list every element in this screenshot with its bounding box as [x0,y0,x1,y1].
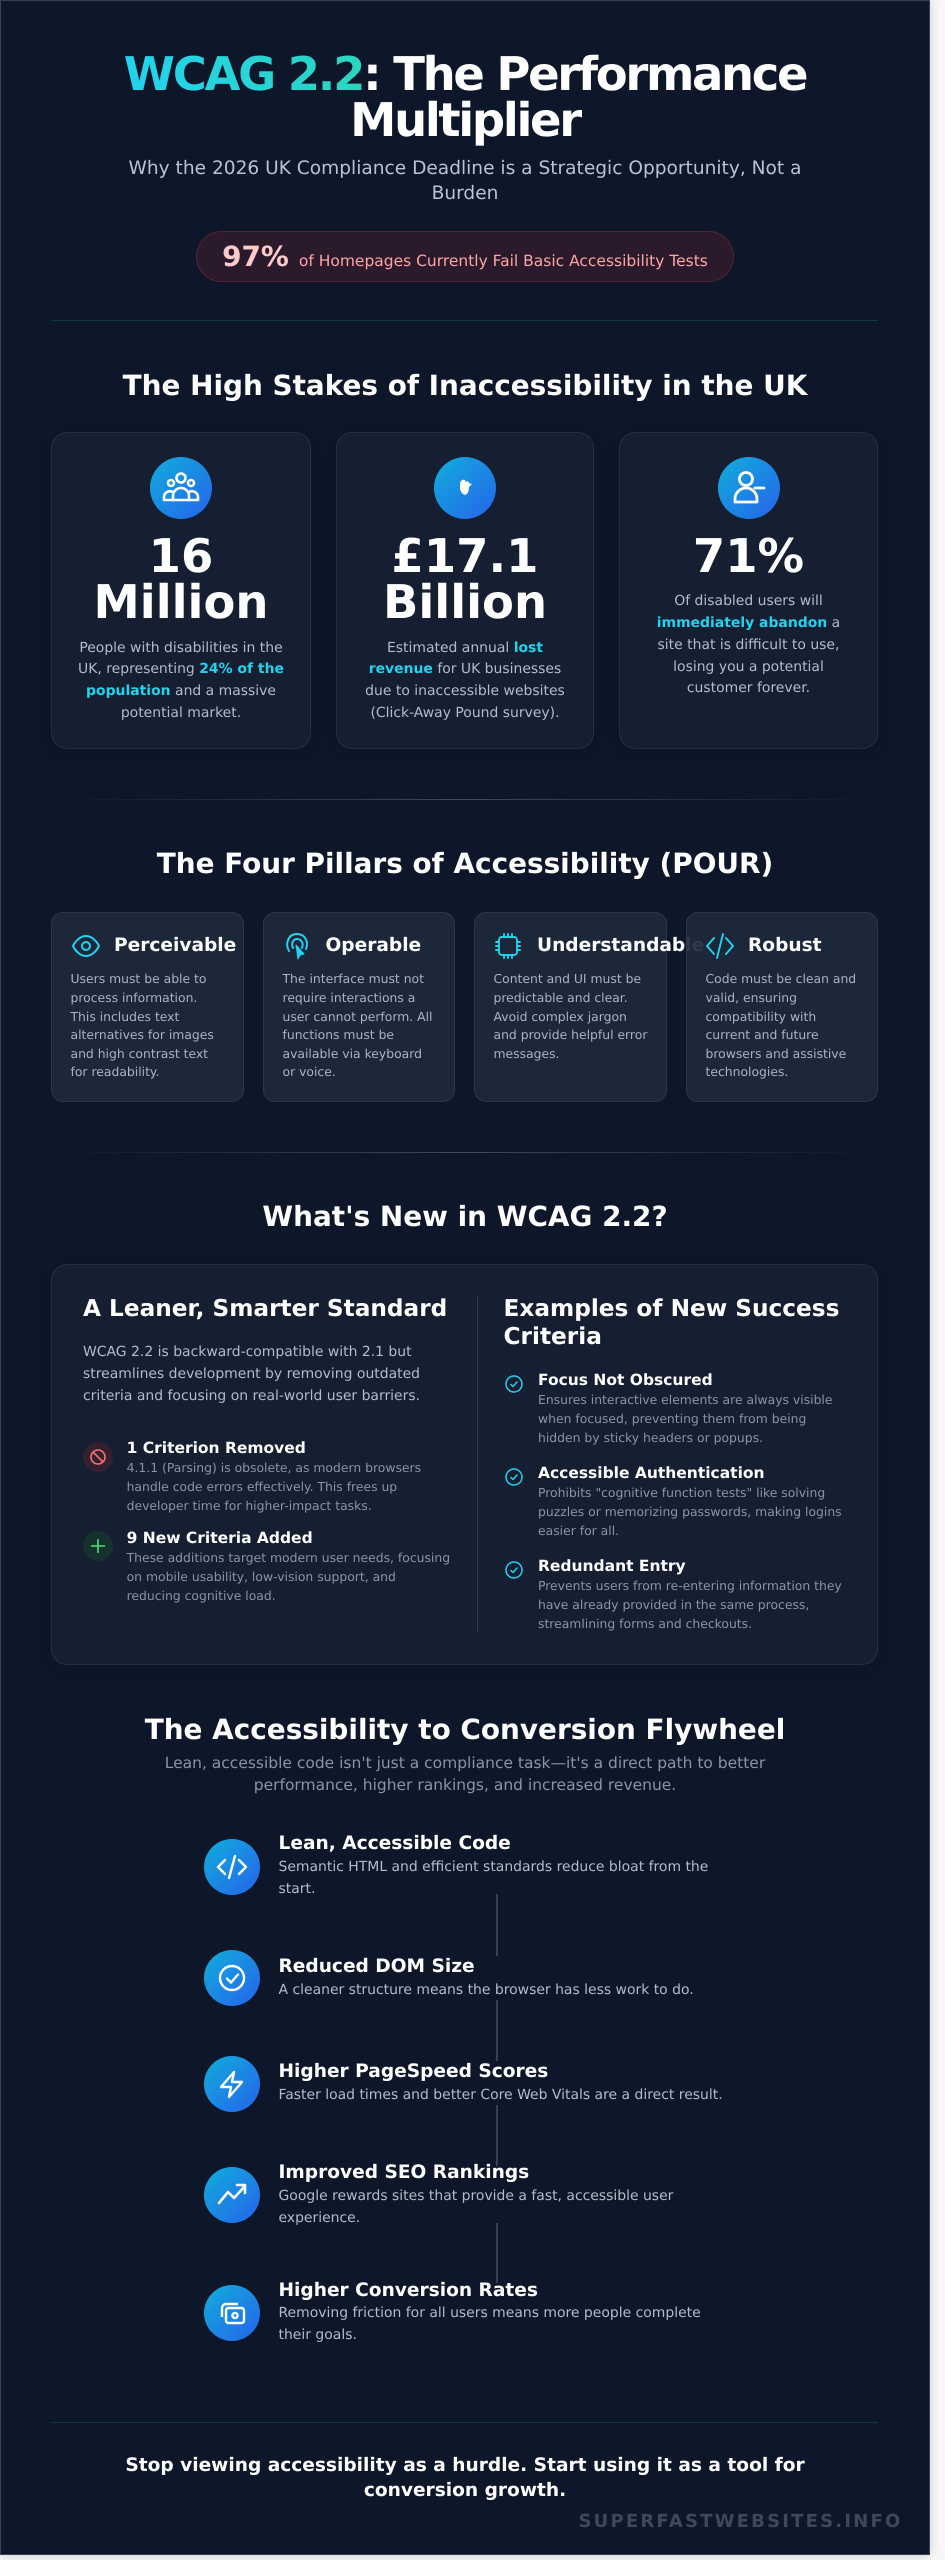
icon: users [150,457,212,519]
pillar text: valid, ensuring [706,990,797,1005]
item text: Ensures interactive elements are always visible [538,1392,832,1407]
item: accessible authentication [505,1464,842,1538]
stat number: 16 [149,529,213,583]
item text: streamlining forms and checkouts. [538,1616,752,1631]
intro text: streamlines development by removing outdated [83,1366,420,1382]
step title: Reduced DOM Size [278,1956,475,1977]
step text: A cleaner structure means the browser has less work to do. [278,1982,694,1998]
item: redundant entry [505,1557,842,1631]
pillar text: functions must be [282,1027,394,1042]
pillar text: technologies. [706,1064,788,1079]
item text: Prohibits "cognitive function tests" like solving [538,1485,825,1500]
icon: eye [72,935,100,957]
stat description: due to inaccessible websites [365,683,565,699]
icon: lightning [204,2056,260,2112]
step text: Google rewards sites that provide a fast, accessible user [278,2188,673,2204]
item: new criteria added [83,1529,450,1603]
item text [538,1578,842,1631]
item text: These additions target modern user needs, focusing [127,1550,450,1565]
icon: pointer [286,933,308,960]
step title: Improved SEO Rankings [278,2162,529,2183]
pillar text: alternatives for images [70,1027,214,1042]
icon: cash stack [204,2285,260,2341]
pillar text: user cannot perform. All [282,1009,432,1024]
step title: Higher Conversion Rates [278,2280,538,2301]
pillar text: predictable and clear. [494,990,628,1005]
pillar text: and high contrast text [70,1046,208,1061]
stat description: potential market. [121,705,241,721]
callout: 97 percent fail [196,231,734,282]
step: improved SEO [204,2162,674,2226]
stat description [78,640,284,721]
item text [127,1460,421,1513]
pillar text: Content and UI must be [494,971,641,986]
closing statement: Stop viewing accessibility as a hurdle. Start using it as a tool for [125,2455,805,2476]
step text: Removing friction for all users means more people complete [278,2305,701,2321]
icon: code [204,1839,260,1895]
stat number: £17.1 [392,529,538,583]
watermark: SUPERFASTWEBSITES.INFO [578,2511,902,2532]
item text: hidden by sticky headers or popups. [538,1430,763,1445]
pillar text: require interactions a [282,990,415,1005]
stat number: Million [94,575,268,629]
closing statement [0,2453,930,2503]
flywheel intro: performance, higher rankings, and increased revenue. [254,1776,676,1794]
column heading: new success criteria: Examples of New Success [504,1295,839,1322]
icon: ban [83,1442,113,1472]
step: higher conversion [204,2280,701,2343]
stat description: population and a massive [86,683,276,699]
column heading: new success criteria: Criteria [504,1323,602,1350]
pillar text: Users must be able to [70,971,206,986]
pillar text: browsers and assistive [706,1046,846,1061]
flywheel intro: Lean, accessible code isn't just a compliance task—it's a direct path to better [165,1754,765,1772]
heading: flywheel: The Accessibility to Conversion Flywheel [145,1712,785,1746]
icon: user minus [718,457,780,519]
pillar title: Perceivable [114,935,236,956]
pillar text: compatibility with [706,1009,816,1024]
item text [126,1550,450,1603]
icon: check [505,1375,523,1393]
item text [538,1392,832,1445]
stat description: (Click-Away Pound survey). [370,705,560,721]
pillar text: Avoid complex jargon [494,1009,627,1024]
item: focus not obscured [505,1371,832,1445]
step text: their goals. [278,2327,357,2343]
item text: have already provided in the same process, [538,1597,809,1612]
item text: 4.1.1 (Parsing) is obsolete, as modern browsers [127,1460,421,1475]
panel: perceivable [51,912,244,1102]
heading: high stakes: The High Stakes of Inaccessibility in the UK [123,368,807,402]
item text: on mobile usability, low-vision support, and [127,1569,396,1584]
step text [278,1859,708,1897]
step text [278,2303,701,2347]
step title: Higher PageSpeed Scores [278,2061,548,2082]
subtitle: Why the 2026 UK Compliance Deadline is a Strategic Opportunity, Not a [128,158,801,179]
step title: Lean, Accessible Code [278,1833,511,1854]
title [124,47,806,147]
pillar text: process information. [70,990,197,1005]
subtitle: Burden [432,183,498,204]
panel: 71 percent stat [619,432,878,749]
connector [496,2223,498,2283]
icon: cpu chip [495,933,521,959]
column heading: new success criteria [504,1295,839,1350]
connector [496,1894,498,1956]
item text: developer time for higher-impact tasks. [127,1498,372,1513]
pillar title: Understandable [537,935,704,956]
pillar text: available via keyboard [282,1046,422,1061]
closing statement: conversion growth. [364,2480,566,2501]
pillar title: Operable [326,935,421,956]
panel: understandable [474,912,667,1102]
step text: experience. [278,2210,360,2226]
stat description: immediately abandon a [657,615,840,631]
pillar text: for readability. [70,1064,159,1079]
stat description: losing you a potential [673,659,824,675]
stat number [94,529,268,629]
stat description: revenue for UK businesses [369,661,561,677]
heading: what's new: What's New in WCAG 2.2? [262,1200,668,1232]
stat description: customer forever. [687,680,810,696]
icon: trending up [204,2167,260,2223]
item text: reducing cognitive load. [127,1588,276,1603]
icon: check circle [204,1950,260,2006]
pillar text: messages. [494,1046,560,1061]
pillar text: This includes text [70,1009,179,1024]
stat number: Billion [383,575,547,629]
title: Multiplier [350,93,580,147]
icon: lost revenue [434,457,496,519]
step text: start. [278,1881,315,1897]
pillar text [494,971,648,1061]
heading: four pillars: The Four Pillars of Accessibility (POUR) [157,846,773,880]
column heading: leaner standard: A Leaner, Smarter Standard [83,1295,447,1322]
step: reduced DOM size [204,1950,694,2006]
item text: Prevents users from re-entering information they [538,1578,842,1593]
stat description [657,593,840,696]
flywheel intro [165,1754,766,1794]
stat number [383,529,547,629]
item text: when focused, preventing them from being [538,1411,806,1426]
item title: 1 Criterion Removed [127,1439,306,1457]
stat description: UK, representing 24% of the [78,661,284,677]
intro text [83,1344,420,1404]
pillar text: or voice. [282,1064,336,1079]
subtitle [128,158,801,204]
pillar text: The interface must not [282,971,424,986]
pillar text [706,971,856,1079]
stat description: People with disabilities in the [79,640,283,656]
pillar title: Robust [748,935,822,956]
panel: robust [686,912,878,1102]
step: lean accessible code [204,1833,708,1897]
step: higher pagespeed [204,2056,723,2112]
stat number: 71% [693,529,804,583]
item text: handle code errors effectively. This frees up [127,1479,397,1494]
stat description: Of disabled users will [674,593,823,609]
title: WCAG 2.2: The Performance [124,47,806,101]
pillar text: Code must be clean and [706,971,856,986]
connector [496,2000,498,2061]
item title: Focus Not Obscured [538,1371,713,1389]
connector [496,2105,498,2166]
pillar text [70,971,214,1079]
item title: Accessible Authentication [538,1464,765,1482]
pillar text [282,971,432,1079]
icon: check [505,1561,523,1579]
panel: 16 million stat [51,432,311,749]
pillar text: current and future [706,1027,819,1042]
step text: Faster load times and better Core Web Vitals are a direct result. [278,2087,723,2103]
item text: easier for all. [538,1523,619,1538]
pillar text: and provide helpful error [494,1027,647,1042]
item text: puzzles or memorizing passwords, making logins [538,1504,842,1519]
step text [278,2188,674,2226]
icon: plus [83,1531,113,1561]
stat description: Estimated annual lost [387,640,543,656]
item title: Redundant Entry [538,1557,686,1575]
icon: check [505,1468,523,1486]
intro text: WCAG 2.2 is backward-compatible with 2.1 but [83,1344,412,1360]
item title: 9 New Criteria Added [127,1529,313,1547]
item: criterion removed [83,1439,421,1513]
panel: 17.1 billion stat [336,432,594,749]
panel: operable [263,912,455,1102]
item text [538,1485,842,1538]
intro text: criteria and focusing on real-world user barriers. [83,1388,420,1404]
step text: Semantic HTML and efficient standards reduce bloat from the [278,1859,708,1875]
stat description [365,640,565,721]
icon: code [706,933,734,959]
stat description: site that is difficult to use, [658,637,839,653]
callout: 97 percent fail: 97% of Homepages Currently Fail Basic Accessibility Tests [222,240,708,273]
panel: what's new in WCAG 2.2 [51,1264,878,1665]
